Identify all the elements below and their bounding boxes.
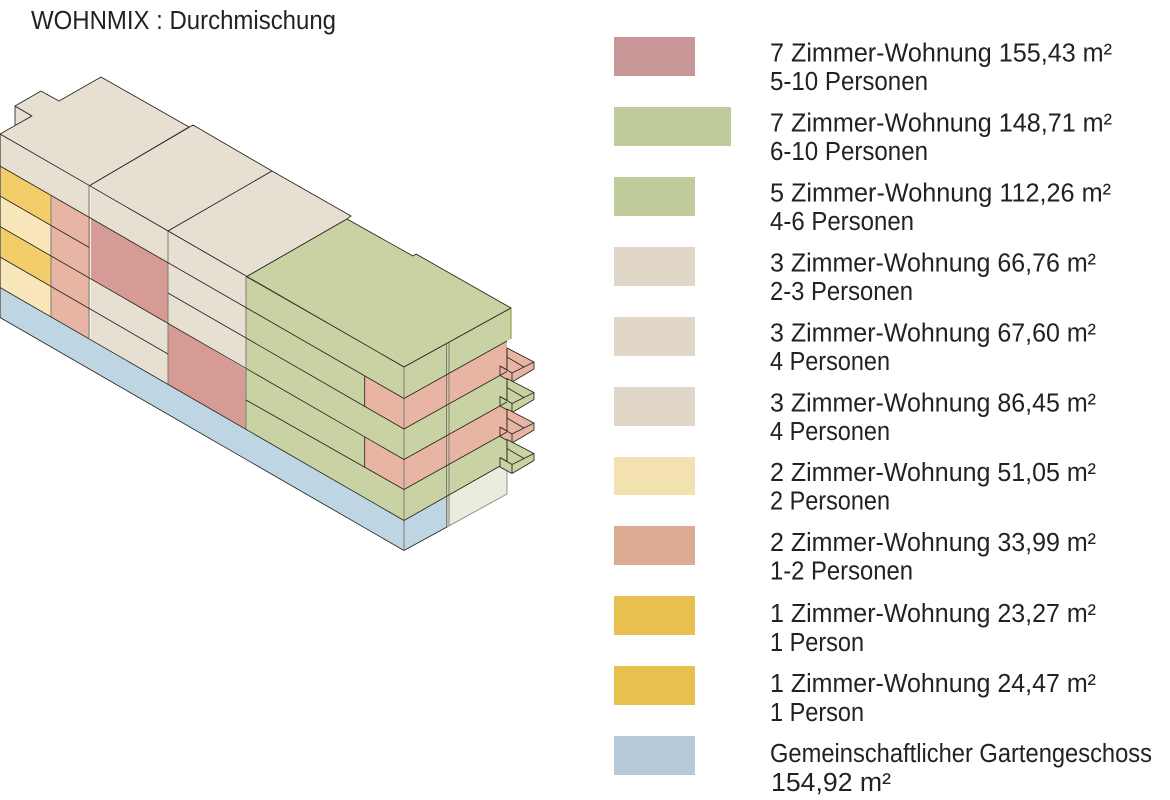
legend item: 2 Zimmer 51,05: 2 Zimmer-Wohnung 51,05 m² [770,459,1096,487]
legend item: 1 Zimmer 24,47: 1 Person [770,699,864,727]
legend item: 1 Zimmer 24,47: 1 Zimmer-Wohnung 24,47 m² [770,670,1096,698]
legend [614,37,1152,797]
balconies [500,348,534,474]
legend item: 3 Zimmer 67,60 [614,317,1096,376]
legend item: 7 Zimmer 155,43 [614,37,1112,96]
legend item: 1 Zimmer 23,27: 1 Zimmer-Wohnung 23,27 m² [770,600,1096,628]
legend item: 3 Zimmer 86,45: 3 Zimmer-Wohnung 86,45 m² [770,390,1096,418]
legend item: 1 Zimmer 23,27 [614,596,1096,657]
legend item: 2 Zimmer 51,05 [614,457,1096,516]
legend item: 2 Zimmer 33,99: 2 Zimmer-Wohnung 33,99 m² [770,529,1096,557]
legend item: 5 Zimmer 112,26: 5 Zimmer-Wohnung 112,26 m² [770,180,1111,208]
legend item: 7 Zimmer 155,43: 5-10 Personen [770,68,928,96]
facade floor lines [0,134,511,550]
legend item: Gartengeschoss: Gemeinschaftlicher Gartengeschoss [770,740,1152,768]
title: WOHNMIX : Durchmischung [31,7,336,35]
legend item: 2 Zimmer 51,05: 2 Personen [770,488,890,516]
legend item: 7 Zimmer 148,71: 6-10 Personen [770,138,928,166]
facade vertical edges [0,134,511,550]
legend item: Gartengeschoss [614,736,1152,797]
legend item: 5 Zimmer 112,26 [614,177,1111,236]
legend item: 5 Zimmer 112,26: 4-6 Personen [770,208,914,236]
right facade: floors [404,308,511,550]
legend item: 1 Zimmer 24,47 [614,666,1096,727]
left facade: apartment cells [0,134,404,550]
legend item: 3 Zimmer 67,60: 3 Zimmer-Wohnung 67,60 m² [770,320,1096,348]
legend item: 2 Zimmer 33,99 [614,526,1096,586]
legend item: 3 Zimmer 66,76: 2-3 Personen [770,278,913,306]
legend item: 3 Zimmer 86,45: 4 Personen [770,418,890,446]
legend item: 7 Zimmer 155,43: 7 Zimmer-Wohnung 155,43 m² [770,40,1112,68]
legend item: 7 Zimmer 148,71: 7 Zimmer-Wohnung 148,71 m² [770,110,1112,138]
legend item: 3 Zimmer 66,76: 3 Zimmer-Wohnung 66,76 m² [770,250,1096,278]
roof: beige apartments [0,77,351,277]
legend item: Gartengeschoss: 154,92 m² [771,769,891,797]
roof: green apartment [246,219,511,367]
legend item: 3 Zimmer 66,76 [614,247,1096,306]
legend item: 2 Zimmer 33,99: 1-2 Personen [770,558,913,586]
legend item: 3 Zimmer 86,45 [614,387,1096,446]
isometric building diagram [0,77,534,550]
legend item: 1 Zimmer 23,27: 1 Person [770,629,864,657]
legend item: 7 Zimmer 148,71 [614,107,1112,166]
legend item: 3 Zimmer 67,60: 4 Personen [770,348,890,376]
